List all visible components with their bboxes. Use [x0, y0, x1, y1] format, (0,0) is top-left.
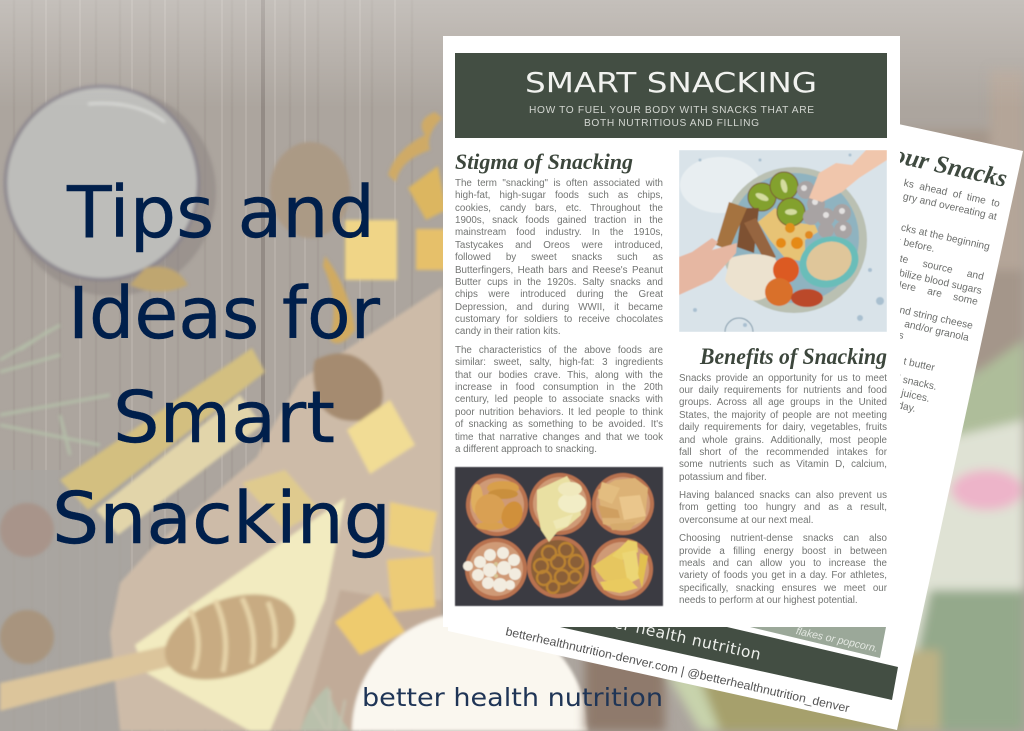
text block: benefits of snacking: Having balanced snacks can also prevent us	[679, 490, 887, 501]
text block: stigma of snacking: cookies, candy bars, etc. Throughout the	[455, 203, 663, 214]
heading: Benefits of Snacking: Benefits of Snacking	[699, 344, 887, 369]
back page body text	[893, 178, 1001, 415]
text block: stigma of snacking: candy in their ration kits.	[455, 326, 561, 337]
back page heading: Your Snacks: Your Snacks	[878, 139, 1010, 193]
banner subtitle	[529, 105, 814, 129]
text block: benefits of snacking: meals and can allow you to increase the	[679, 558, 887, 569]
text block: benefits of snacking: Snacks provide an opportunity for us to meet	[679, 373, 887, 384]
text block: benefits of snacking: our daily requirements for nutrients and food	[679, 385, 887, 396]
text block: stigma of snacking: Tastycakes and Oreos were introduced,	[455, 240, 663, 251]
text block: stigma of snacking: similar: sweet, salty, high-fat: 3 ingredients	[455, 357, 663, 368]
text block: benefits of snacking: fall short of the recommended intakes for	[679, 447, 887, 458]
front handout page	[443, 36, 900, 627]
title: Tips and Ideas for Smart Snacking: Ideas for	[68, 272, 381, 355]
text block: stigma of snacking: followed by sweet snacks such as	[455, 252, 663, 263]
text block: benefits of snacking: States, the majority of people are not meeting	[679, 410, 887, 421]
back page body text: ks ahead of time to	[903, 178, 1001, 210]
text block: benefits of snacking: and whole grains. Additionally, most people	[679, 435, 887, 446]
back page body text: : before.	[897, 236, 936, 255]
back page body text: nd string cheese	[898, 305, 974, 332]
text block: benefits of snacking: specifically, snacking ensures we meet our	[679, 583, 887, 594]
text block: benefits of snacking: daily requirements for dairy, vegetables, fruits	[679, 422, 887, 433]
back page body text: ate source and	[893, 252, 985, 283]
text block: stigma of snacking: customary for soldiers to receive chocolates	[455, 314, 663, 325]
text block: stigma of snacking: Depression, and during WWII, it became	[455, 302, 663, 313]
back page dark footer strip	[560, 607, 898, 700]
text block: benefits of snacking: from getting too hungry and as a result,	[679, 502, 887, 513]
text block: stigma of snacking: mainstream food industry. In the 1910s,	[455, 227, 663, 238]
back page sage callout sliver	[750, 625, 886, 658]
back page dark footer strip: better health nutrition	[580, 607, 763, 664]
back page footer contact line: betterhealthnutrition-denver.com | @betterhealthnutrition_denver	[504, 624, 851, 715]
title: Tips and Ideas for Smart Snacking: Snacking	[52, 477, 391, 560]
text block: stigma of snacking: high-fat, high-sugar foods such as chips,	[455, 190, 663, 201]
text block: benefits of snacking: variety of foods you get in a day. For athletes,	[679, 570, 887, 581]
back page body text: and/or granola	[903, 319, 970, 344]
back page body text: l snacks.	[897, 374, 938, 393]
back page body text: gry and overeating at	[902, 191, 998, 223]
banner subtitle: BOTH NUTRITIOUS AND FILLING	[584, 118, 759, 129]
title: Tips and Ideas for Smart Snacking: Smart	[113, 376, 335, 459]
photo: hands reaching for a healthy snack plate	[679, 150, 887, 332]
text block: stigma of snacking: Butterfingers, Heath bars and Reese's Peanut	[455, 265, 663, 276]
text block: benefits of snacking: provide a filling energy boost in between	[679, 546, 887, 557]
text block: stigma of snacking: century, led people to associate snacks with	[455, 394, 663, 405]
back page body text: cks at the beginning	[900, 223, 991, 253]
text block: stigma of snacking: increase in food consumption in the 20th	[455, 382, 663, 393]
text block: benefits of snacking: some nutrients such as Vitamin D, calcium,	[679, 459, 887, 470]
text block: stigma of snacking: 1900s, snack foods gained traction in the	[455, 215, 663, 226]
back page body text: day.	[896, 400, 917, 415]
text block: stigma of snacking: that our bodies crave. This, along with the	[455, 370, 663, 381]
text block: stigma of snacking: time that narrative changes and that we took	[455, 432, 663, 443]
text block: stigma of snacking: a different approach to snacking.	[455, 444, 597, 455]
text block: stigma of snacking: Butter cups in the 1920s. Salty snacks and	[455, 277, 663, 288]
back page body text: bilize blood sugars	[898, 268, 983, 297]
text block: benefits of snacking: groups. Across all age groups in the United	[679, 397, 887, 408]
heading: Stigma of Snacking: Stigma of Snacking	[455, 149, 633, 174]
text block: benefits of snacking: potassium and fiber.	[679, 472, 767, 483]
brand name: better health nutrition: better health nutrition	[362, 683, 663, 712]
text block: stigma of snacking: of snacking as something to be avoided. It's	[455, 419, 663, 430]
back page sage callout sliver: flakes or popcorn.	[795, 625, 879, 655]
text block: stigma of snacking: The characteristics of the above foods are	[455, 345, 663, 356]
back page body text: Here are some	[893, 279, 979, 308]
text block: stigma of snacking: The term "snacking" is often associated with	[455, 178, 663, 189]
text block: stigma of snacking: poor nutrition behaviors. It led people to think	[455, 407, 663, 418]
banner title: SMART SNACKING	[525, 66, 817, 99]
back page body text: t butter	[902, 356, 936, 374]
back page body text: s	[897, 330, 905, 342]
text block: benefits of snacking: overconsume at our next meal.	[679, 515, 814, 526]
text block: benefits of snacking: Choosing nutrient-dense snacks can also	[679, 533, 887, 544]
text block: benefits of snacking: needs to perform at our highest potential.	[679, 595, 858, 606]
text block: stigma of snacking: chips were introduced during the Great	[455, 289, 663, 300]
back page body text: juices.	[899, 388, 931, 405]
banner subtitle: HOW TO FUEL YOUR BODY WITH SNACKS THAT ARE	[529, 105, 814, 116]
title: Tips and Ideas for Smart Snacking: Tips and	[66, 171, 375, 254]
